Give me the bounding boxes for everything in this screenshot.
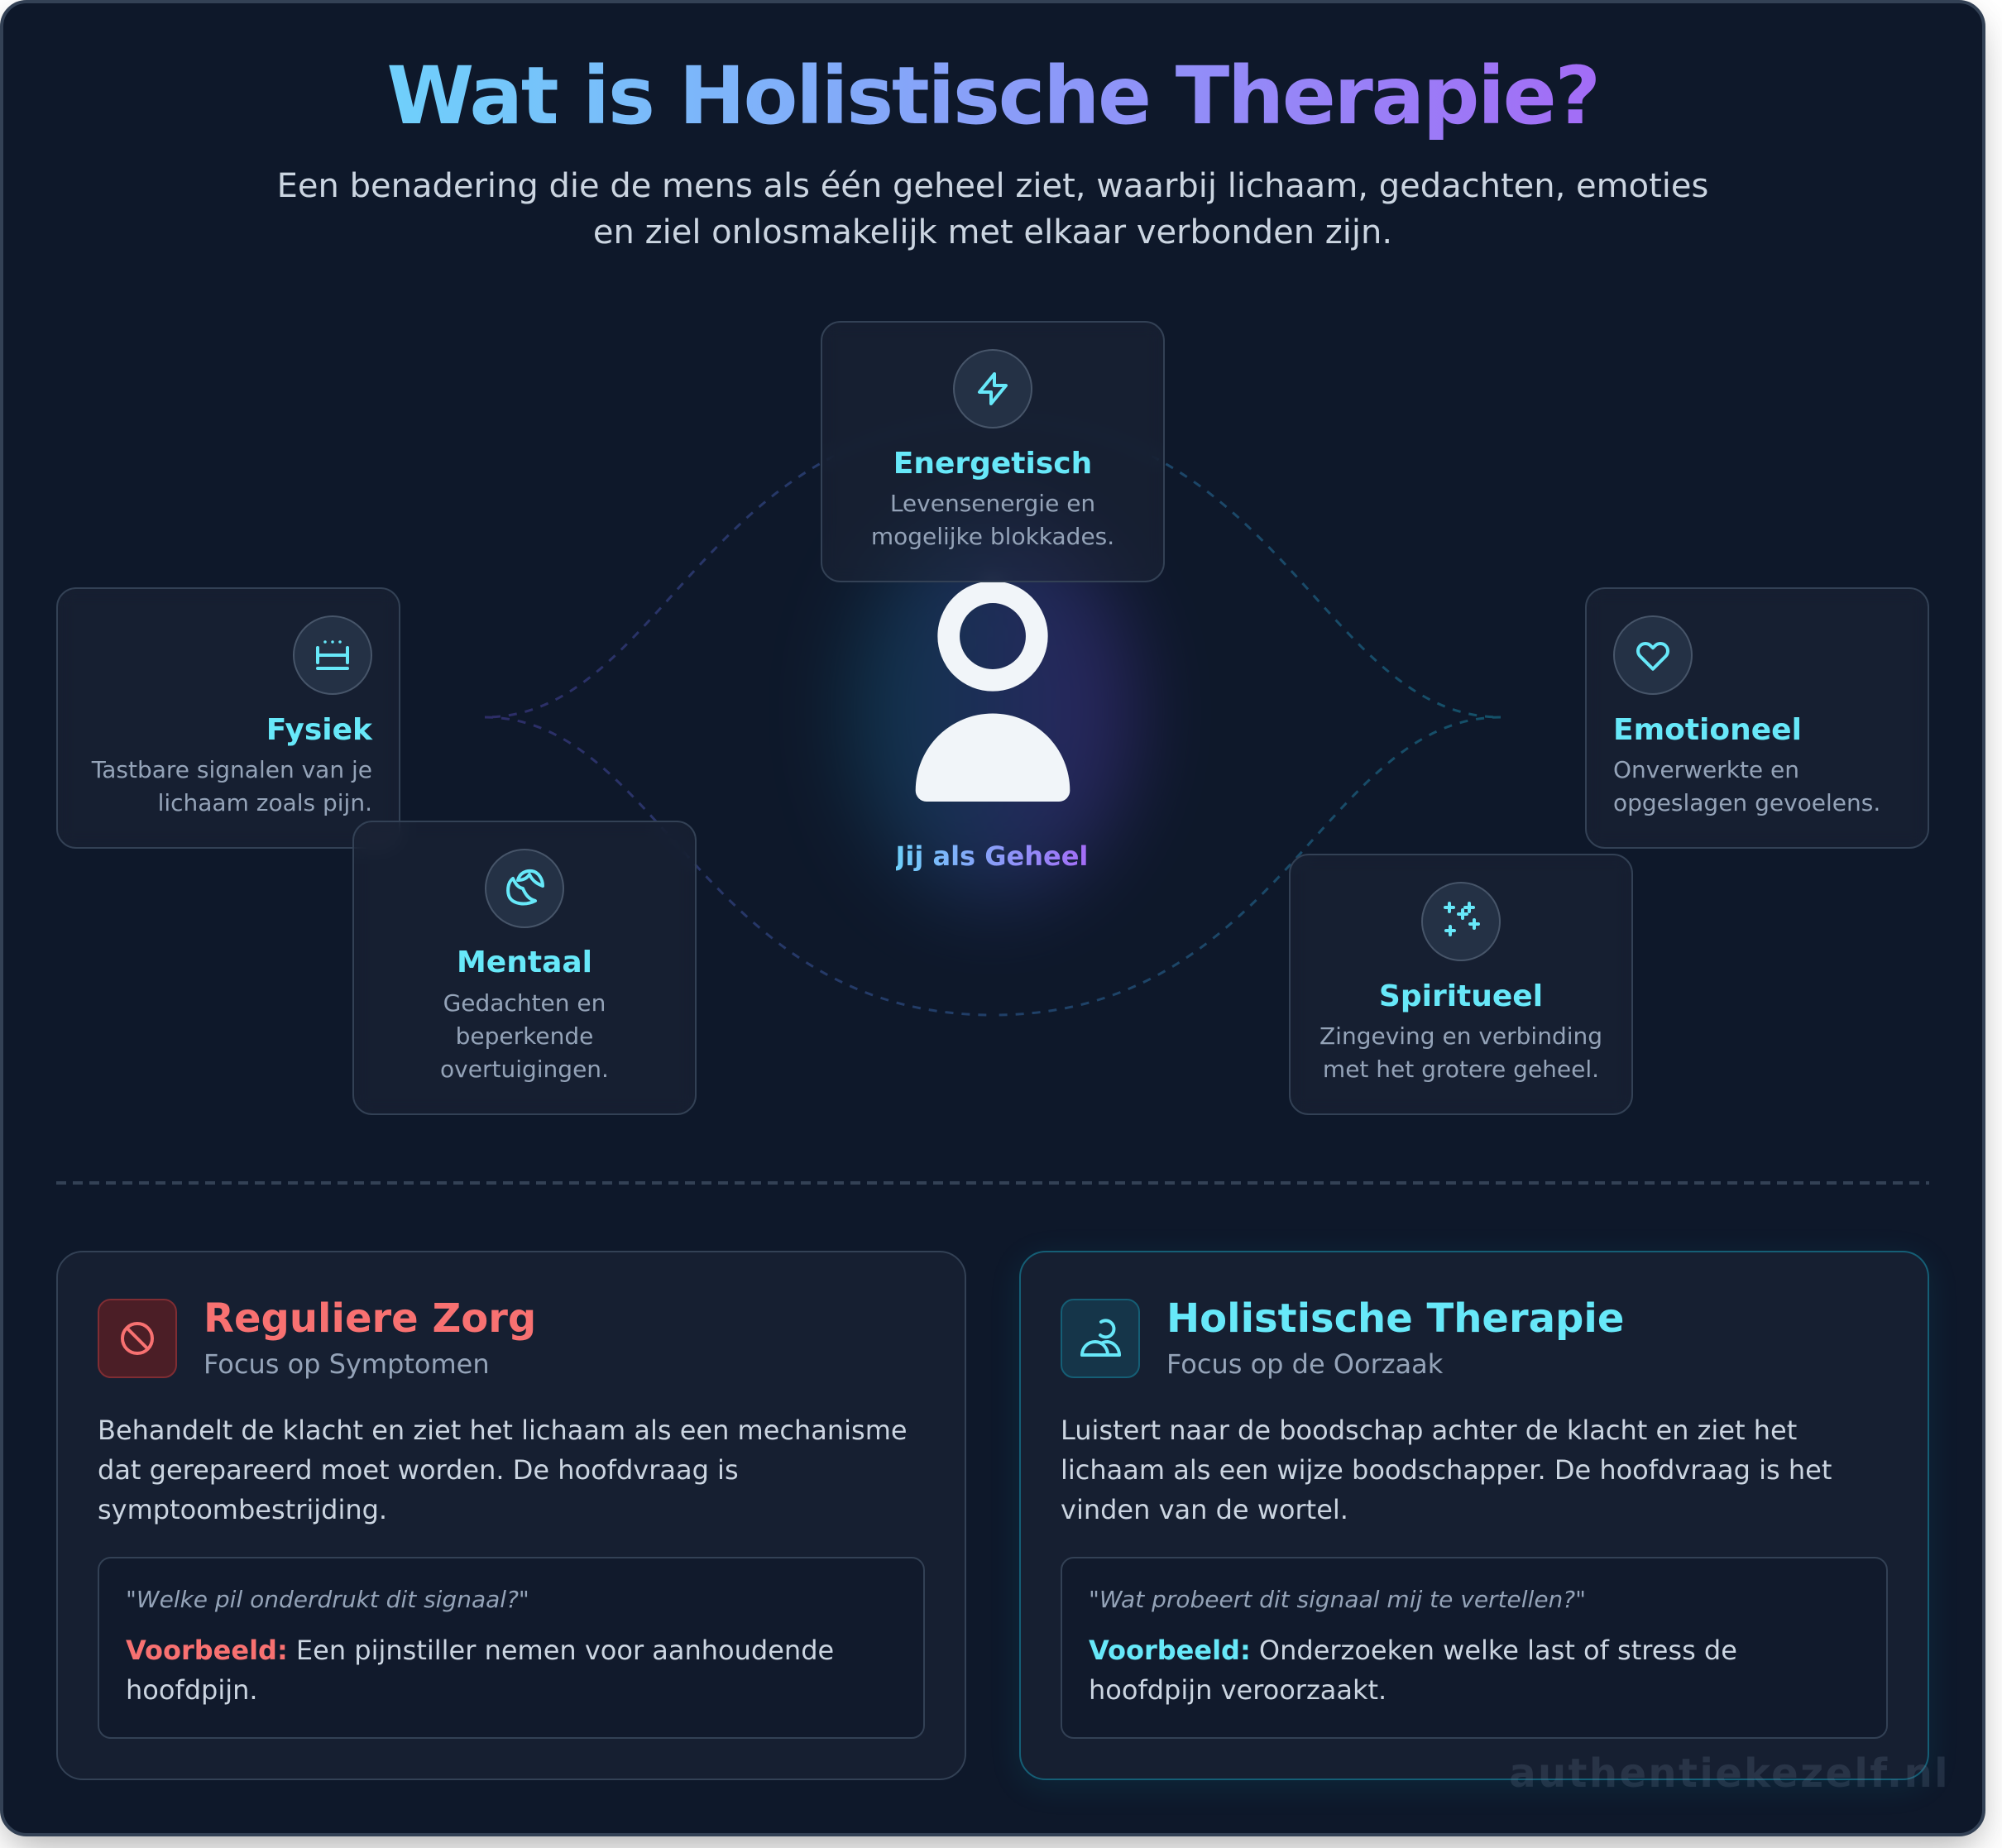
body text: Luistert naar de boodschap achter de klacht en ziet het <box>1061 1415 1797 1446</box>
description: overtuigingen. <box>440 1056 609 1083</box>
body text: symptoombestrijding. <box>98 1494 387 1525</box>
quote: "Welke pil onderdrukt dit signaal?" <box>126 1586 529 1613</box>
subheading: Focus op de Oorzaak <box>1166 1348 1443 1380</box>
heading: Spiritueel <box>1379 979 1543 1013</box>
head <box>949 592 1037 680</box>
card: Emotioneel <box>1585 587 1929 849</box>
card: Spiritueel <box>1289 854 1633 1115</box>
heading: Fysiek <box>266 713 372 747</box>
description: beperkende <box>456 1022 593 1050</box>
body <box>916 713 1070 802</box>
description <box>440 989 609 1083</box>
example <box>1089 1635 1737 1706</box>
subtitle: en ziel onlosmakelijk met elkaar verbonden zijn. <box>593 213 1392 251</box>
heading: Holistische Therapie <box>1166 1295 1624 1342</box>
icon: bolt <box>953 349 1032 428</box>
body text: lichaam als een wijze boodschapper. De hoofdvraag is het <box>1061 1454 1832 1486</box>
description: mogelijke blokkades. <box>871 523 1114 550</box>
description: Zingeving en verbinding <box>1320 1022 1602 1050</box>
watermark: authentiekezelf.nl <box>1509 1750 1950 1797</box>
body text <box>1061 1415 1832 1525</box>
heading: Emotioneel <box>1613 713 1802 747</box>
subheading: Focus op Symptomen <box>204 1348 490 1380</box>
description: Onverwerkte en <box>1613 756 1799 783</box>
heading: Reguliere Zorg <box>204 1295 536 1342</box>
example: hoofdpijn. <box>126 1674 258 1706</box>
subtitle: Een benadering die de mens als één geheel ziet, waarbij lichaam, gedachten, emoties <box>277 167 1708 205</box>
central glow <box>852 521 1133 902</box>
panel: Holistische Therapie <box>1019 1251 1929 1780</box>
body text: vinden van de wortel. <box>1061 1494 1348 1525</box>
example: Voorbeeld: Onderzoeken welke last of stress de <box>1089 1635 1737 1666</box>
icon: body <box>293 615 372 695</box>
description <box>91 756 372 816</box>
example: Voorbeeld: Een pijnstiller nemen voor aanhoudende <box>126 1635 834 1666</box>
title: Wat is Holistische Therapie? <box>386 50 1599 142</box>
heading: Mentaal <box>457 946 592 979</box>
heading: Energetisch <box>893 447 1092 481</box>
description: Tastbare signalen van je <box>92 756 372 783</box>
description <box>871 490 1114 550</box>
example box <box>98 1557 925 1739</box>
panel: Reguliere Zorg <box>56 1251 966 1780</box>
icon: heart <box>1613 615 1693 695</box>
example: hoofdpijn veroorzaakt. <box>1089 1674 1387 1706</box>
card: Mentaal <box>352 821 697 1115</box>
card: Fysiek <box>56 587 400 849</box>
description: opgeslagen gevoelens. <box>1613 789 1880 816</box>
icon: ban <box>98 1299 177 1378</box>
card: Energetisch <box>821 321 1165 582</box>
description <box>1613 756 1880 816</box>
body text: Behandelt de klacht en ziet het lichaam als een mechanisme <box>98 1415 908 1446</box>
body text: dat gerepareerd moet worden. De hoofdvraag is <box>98 1454 739 1486</box>
description: Gedachten en <box>443 989 606 1017</box>
description: lichaam zoals pijn. <box>158 789 372 816</box>
center label: Jij als Geheel <box>895 840 1088 872</box>
description: met het grotere geheel. <box>1323 1056 1599 1083</box>
description <box>1320 1022 1602 1083</box>
description: Levensenergie en <box>890 490 1095 517</box>
example box <box>1061 1557 1888 1739</box>
icon: person <box>1061 1299 1140 1378</box>
example <box>126 1635 834 1706</box>
quote: "Wat probeert dit signaal mij te vertellen?" <box>1089 1586 1586 1613</box>
subtitle <box>277 167 1708 251</box>
person figure <box>915 582 1070 802</box>
icon: sparkles <box>1421 882 1501 961</box>
body text <box>98 1415 908 1525</box>
icon: mind <box>485 849 564 928</box>
